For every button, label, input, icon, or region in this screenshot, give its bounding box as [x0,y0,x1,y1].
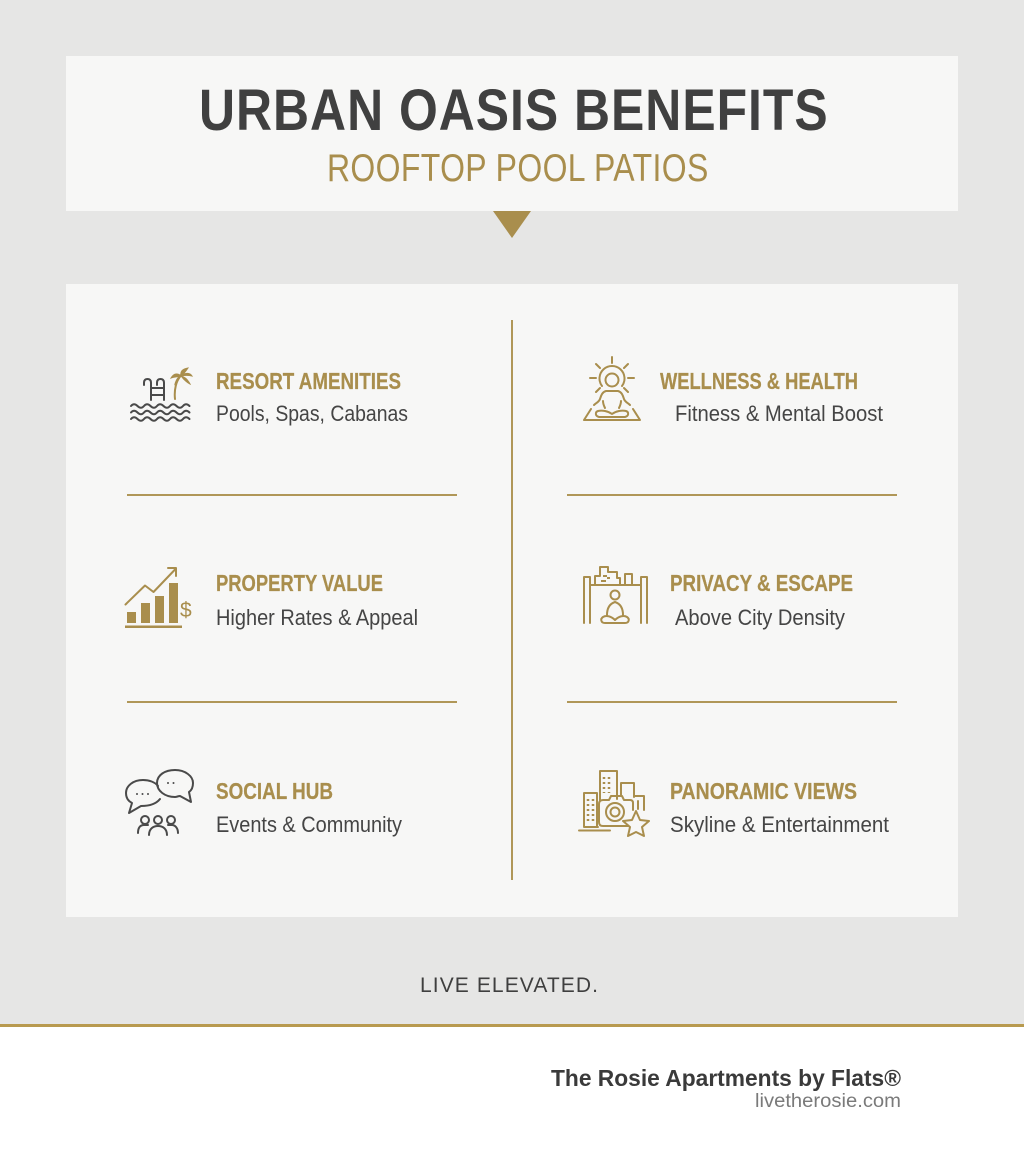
benefit: social hub [126,770,402,837]
icon: rising bar chart with dollar [125,568,192,628]
subtitle: ROOFTOP POOL PATIOS [327,146,708,190]
pointer triangle [493,211,531,238]
description: Pools, Spas, Cabanas [216,401,408,426]
benefit: privacy and escape [584,567,853,630]
main benefits panel [66,284,958,917]
footer band [0,1024,1024,1154]
website: livetherosie.com [755,1091,901,1112]
benefit: property value [125,568,418,630]
benefit: wellness and health [584,357,883,426]
heading: PANORAMIC VIEWS [670,778,857,804]
icon: pool and palm [131,368,192,421]
description: Higher Rates & Appeal [216,605,418,630]
icon: speech bubbles and people [126,770,193,835]
benefit: resort amenities [131,368,408,426]
description: Skyline & Entertainment [670,812,889,837]
heading: PRIVACY & ESCAPE [670,570,853,596]
heading: WELLNESS & HEALTH [660,368,858,394]
icon: person meditating below city [584,567,647,623]
description: Above City Density [675,605,845,630]
header panel [66,56,958,211]
brand name: The Rosie Apartments by Flats® [551,1065,901,1091]
description: Events & Community [216,812,402,837]
icon: meditating figure with sun [584,357,640,420]
heading: PROPERTY VALUE [216,570,383,596]
benefit: panoramic views [579,771,889,837]
description: Fitness & Mental Boost [675,401,883,426]
title: URBAN OASIS BENEFITS [199,79,828,143]
icon: rising bar chart with dollar: $ [180,599,192,622]
tagline: LIVE ELEVATED. [420,974,598,997]
heading: SOCIAL HUB [216,778,333,804]
icon: skyline, camera and star [579,771,649,836]
heading: RESORT AMENITIES [216,368,401,394]
